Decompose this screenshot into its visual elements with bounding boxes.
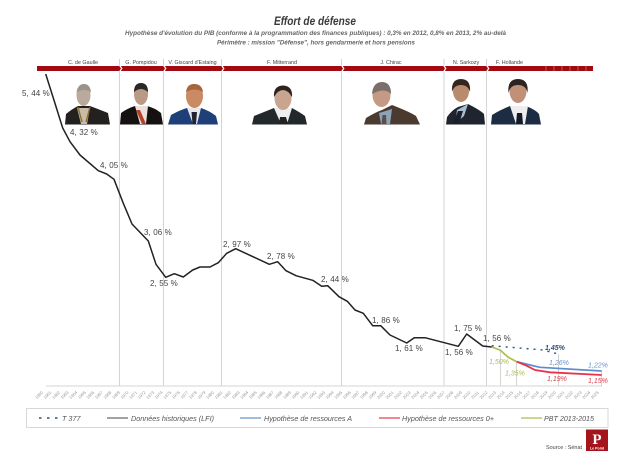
x axis: 1961 <box>42 389 53 400</box>
x axis: 2011 <box>470 390 480 400</box>
x axis: 1976 <box>171 389 181 400</box>
portrait: de Gaulle <box>65 84 110 124</box>
x axis: 1986 <box>256 389 267 400</box>
legend: T 377 <box>62 414 81 423</box>
logo: Le Point: P <box>592 432 602 448</box>
x axis: 1971 <box>128 389 139 400</box>
portrait: Giscard <box>168 84 218 124</box>
subtitle <box>125 30 506 46</box>
source: Source : Sénat <box>546 445 583 451</box>
value labels: 4, 32 % <box>70 128 98 137</box>
x axis: 2018 <box>530 389 540 400</box>
forecast labels <box>489 345 608 385</box>
x axis: 1984 <box>239 389 250 400</box>
x axis: 2007 <box>436 389 446 400</box>
president names: C. de Gaulle <box>68 60 98 66</box>
value labels: 2, 55 % <box>150 279 178 288</box>
x axis: 1997 <box>350 389 361 400</box>
portrait: Mitterrand <box>252 86 307 124</box>
x axis <box>34 386 602 400</box>
value labels: 4, 05 % <box>100 161 128 170</box>
x axis: 2022 <box>564 389 575 400</box>
line: hypothesis 0+ <box>517 362 602 375</box>
x axis: 1980 <box>205 389 215 400</box>
x axis: 1983 <box>231 389 241 400</box>
value labels: 2, 78 % <box>267 252 295 261</box>
x axis: 1968 <box>102 389 113 400</box>
forecast labels: 1,15% <box>588 378 608 385</box>
x axis: 1979 <box>196 389 207 400</box>
x axis: 2013 <box>487 389 498 400</box>
x axis: 1973 <box>145 389 156 400</box>
x axis: 1982 <box>222 389 233 400</box>
x axis: 2017 <box>521 389 532 400</box>
x axis: 1964 <box>68 389 79 400</box>
x axis: 1965 <box>77 389 87 400</box>
legend: Hypothèse de ressources 0+ <box>402 414 494 423</box>
value labels: 1, 75 % <box>454 324 482 333</box>
president names: V. Giscard d'Estaing <box>168 60 217 66</box>
x axis: 1969 <box>111 389 121 400</box>
title: Effort de défense <box>274 16 357 28</box>
x axis: 2000 <box>376 389 386 400</box>
forecast labels: 1,26% <box>549 360 569 367</box>
legend: Données historiques (LFI) <box>131 414 214 423</box>
x axis: 2020 <box>547 389 557 400</box>
portrait: Pompidou <box>120 83 163 124</box>
x axis: 2009 <box>453 389 463 400</box>
forecast labels: 1,19% <box>547 376 567 383</box>
value labels: 3, 06 % <box>144 228 172 237</box>
line: PBT 2013-2015 <box>492 347 517 362</box>
x axis: 2005 <box>419 389 429 400</box>
line chart: historical data <box>46 74 492 347</box>
x axis: 1990 <box>290 389 301 400</box>
x axis: 1972 <box>136 389 147 400</box>
x axis: 1996 <box>342 389 352 400</box>
x axis: 2021 <box>555 389 566 400</box>
president names <box>68 60 523 66</box>
x axis: 1962 <box>51 389 62 400</box>
legend: Hypothèse de ressources A <box>264 414 352 423</box>
x axis: 2002 <box>393 389 404 400</box>
portrait: Hollande <box>491 79 541 124</box>
value labels: 1, 61 % <box>395 344 423 353</box>
x axis: 1977 <box>179 389 190 400</box>
x axis: 2003 <box>402 389 412 400</box>
president names: J. Chirac <box>380 60 402 66</box>
portrait: Sarkozy <box>446 79 485 124</box>
value labels <box>22 89 511 357</box>
x axis: 1999 <box>367 389 378 400</box>
x axis: 1988 <box>273 389 284 400</box>
x axis: 1985 <box>248 389 258 400</box>
x axis: 1970 <box>119 389 130 400</box>
x axis: 1981 <box>213 389 224 400</box>
timeline bar <box>37 66 593 72</box>
x axis: 2025 <box>590 389 600 400</box>
x axis: 2014 <box>496 389 506 400</box>
president names: F. Mitterrand <box>267 60 297 66</box>
x axis: 1967 <box>94 389 104 400</box>
forecast labels: 1,22% <box>588 362 608 370</box>
subtitle: Hypothèse d'évolution du PIB (conforme à la programmation des finances publiques) : 0,3% en 2012, 0,8% en 2013, 2% au-delà <box>125 30 506 37</box>
president names: N. Sarkozy <box>453 60 479 66</box>
president term dividers <box>120 59 602 386</box>
x axis: 1992 <box>307 389 318 400</box>
x axis: 1993 <box>316 389 327 400</box>
value labels: 1, 56 % <box>445 348 473 357</box>
president names: G. Pompidou <box>125 60 157 66</box>
x axis: 1975 <box>162 389 173 400</box>
x axis: 1987 <box>265 389 275 400</box>
line: hypothesis A <box>517 362 602 371</box>
value labels: 2, 97 % <box>223 240 251 249</box>
x axis: 1960 <box>34 389 44 400</box>
x axis: 2006 <box>427 389 438 400</box>
logo: Le Point <box>586 430 608 451</box>
x axis: 2004 <box>410 389 421 400</box>
value labels: 5, 44 % <box>22 89 50 98</box>
x axis: 2015 <box>504 389 515 400</box>
x axis: 2016 <box>513 389 523 400</box>
value labels: 1, 56 % <box>483 334 511 343</box>
x axis: 1978 <box>188 389 198 400</box>
legend: PBT 2013-2015 <box>544 414 595 423</box>
president names: F. Hollande <box>496 60 523 66</box>
x axis: 1998 <box>359 389 369 400</box>
x axis: 1974 <box>154 389 164 400</box>
x axis: 2024 <box>581 389 592 400</box>
x axis: 2019 <box>538 389 549 400</box>
x axis: 2012 <box>478 389 489 400</box>
value labels: 2, 44 % <box>321 275 349 284</box>
forecast labels: 1,35% <box>505 370 525 378</box>
subtitle: Périmètre : mission "Défense", hors gendarmerie et hors pensions <box>217 40 415 46</box>
x axis: 2008 <box>444 389 455 400</box>
value labels: 1, 86 % <box>372 316 400 325</box>
x axis: 1995 <box>333 389 344 400</box>
line: T 377 <box>492 346 558 354</box>
x axis: 1963 <box>59 389 70 400</box>
x axis: 1991 <box>299 389 310 400</box>
x axis: 2010 <box>461 389 472 400</box>
forecast labels: 1,45% <box>545 345 566 352</box>
x axis: 1989 <box>282 389 292 400</box>
x axis: 2001 <box>384 389 395 400</box>
x axis: 1966 <box>85 389 96 400</box>
portrait: Chirac <box>364 82 420 124</box>
logo: Le Point: Le Point <box>590 446 605 450</box>
x axis: 2023 <box>573 389 583 400</box>
forecast labels: 1,50% <box>489 359 509 366</box>
legend <box>26 408 608 428</box>
x axis: 1994 <box>325 389 335 400</box>
